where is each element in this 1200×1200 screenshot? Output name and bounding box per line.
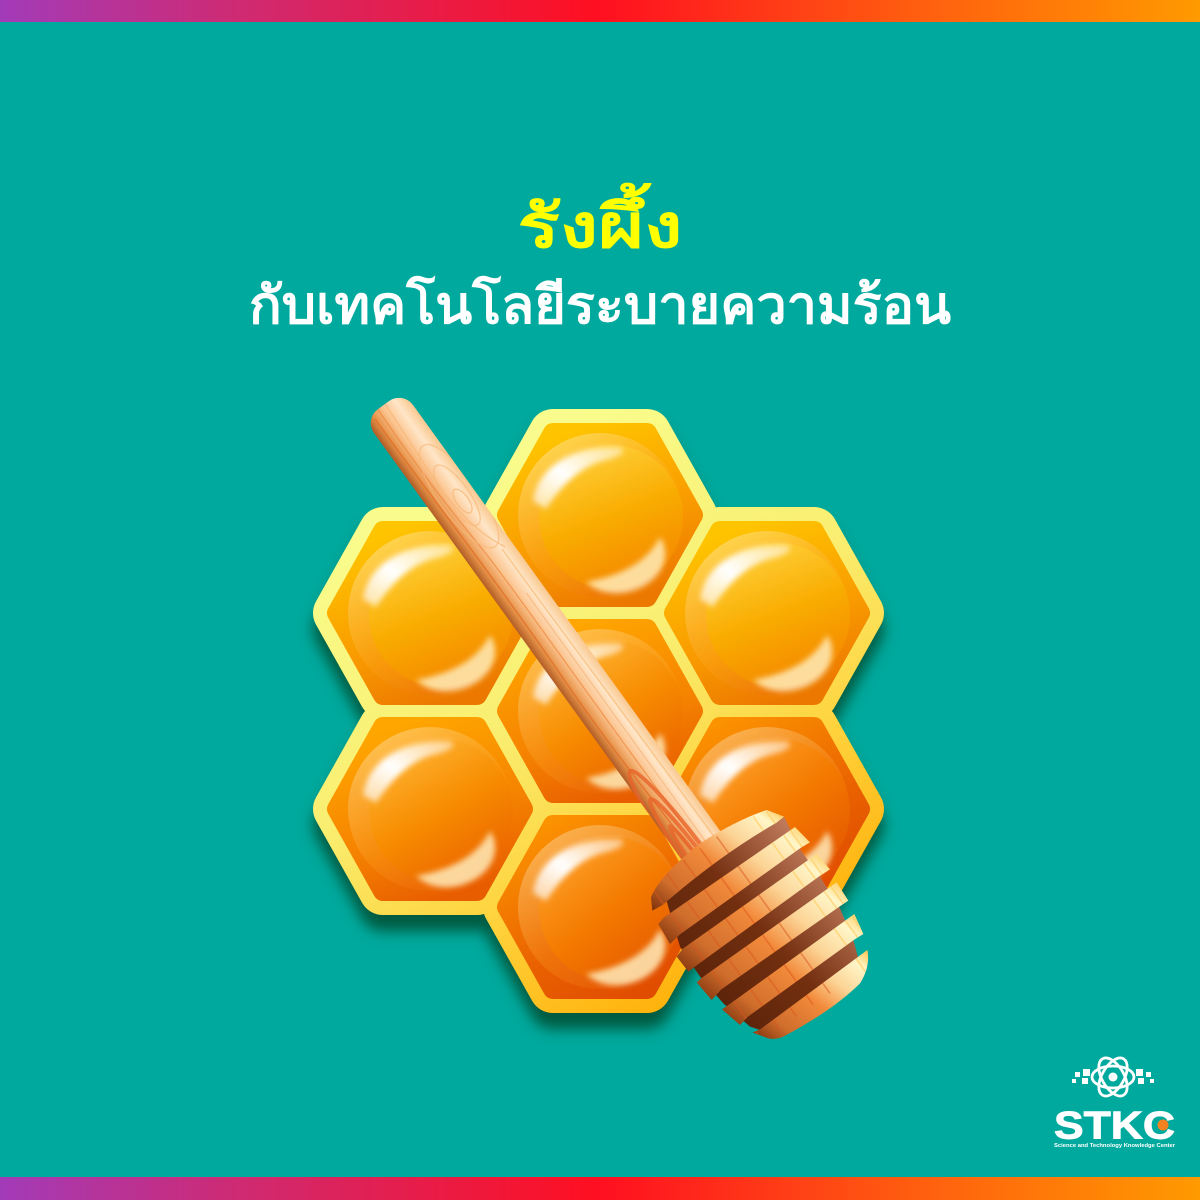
title line: honeycomb: รังผึ้ง xyxy=(518,182,682,260)
bottom gradient bar xyxy=(0,1177,1200,1200)
cell: lower right xyxy=(674,727,860,891)
cell: upper right xyxy=(674,531,860,695)
logo tagline: Science and Technology Knowledge Center xyxy=(1054,1143,1175,1149)
dipper discs xyxy=(651,810,868,1039)
illustration: honeycomb with honey dipper xyxy=(337,389,890,1047)
logo atom emblem xyxy=(1092,1053,1134,1101)
cell: upper left xyxy=(337,531,523,695)
wooden dipper stick xyxy=(370,398,720,860)
logo orange dot xyxy=(1158,1120,1168,1130)
honeycomb shadow xyxy=(337,449,860,1005)
cell: lower left xyxy=(337,727,523,891)
title xyxy=(249,182,951,335)
dipper head xyxy=(651,810,868,1039)
cell: bottom xyxy=(507,825,693,989)
cell: centre xyxy=(507,629,693,793)
wood grain on discs xyxy=(654,811,868,1035)
dipper core grooves xyxy=(663,817,861,1037)
top gradient bar xyxy=(0,0,1200,22)
STKC logo xyxy=(1054,1053,1175,1149)
subtitle line: cooling technology: กับเทคโนโลยีระบายความร้อน xyxy=(249,274,951,335)
cell: top xyxy=(507,433,693,597)
honeycomb frame xyxy=(337,433,860,989)
logo pixel squares xyxy=(1072,1069,1154,1084)
logo wordmark: STKC xyxy=(1054,1104,1175,1148)
